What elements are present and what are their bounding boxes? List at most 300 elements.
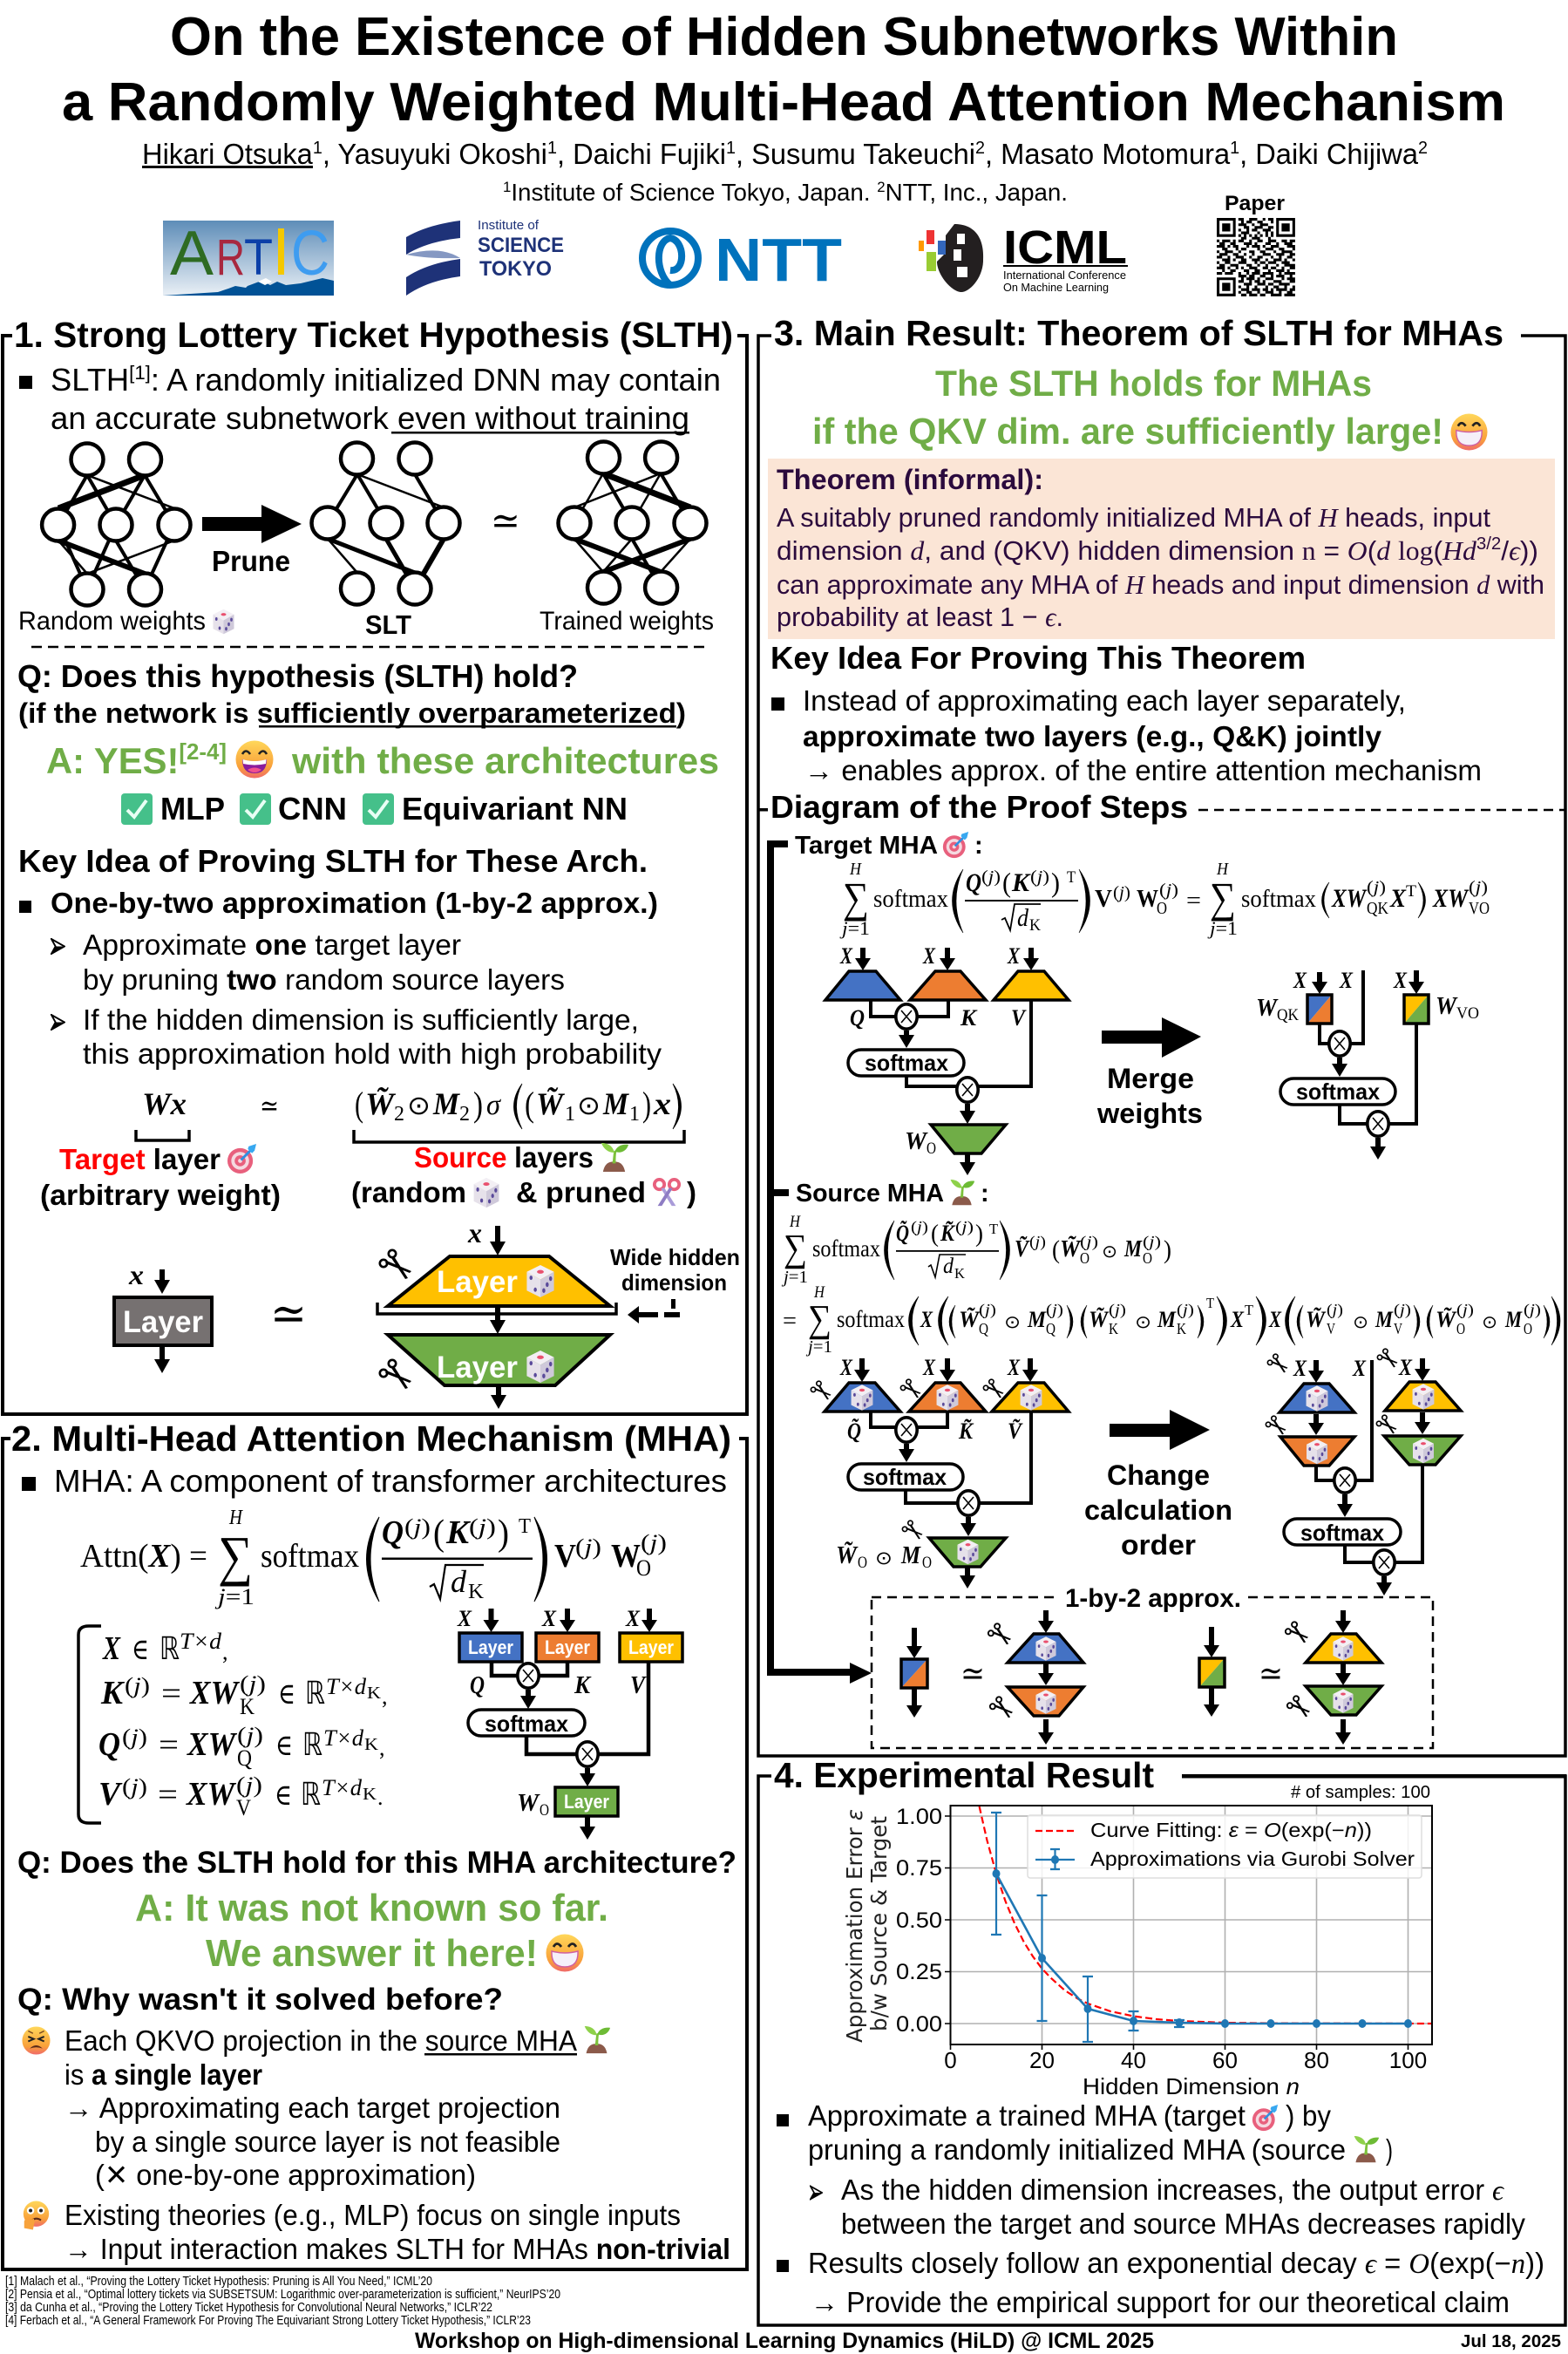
formula: definitions: , [382, 1684, 387, 1709]
headline result [812, 363, 1488, 452]
icon: QR code [1217, 218, 1295, 296]
formula: definitions: ℝ [301, 1777, 321, 1813]
label: SLT: SLT [365, 609, 411, 640]
formula: definitions: ∈ [275, 1779, 292, 1812]
logo: Science Tokyo: Institute of [478, 219, 540, 233]
formula: target MHA: ( [1002, 867, 1011, 898]
formula: source MHA: T [989, 1221, 999, 1237]
text block: experimental setting: Approximate a trained MHA (target [808, 2099, 1246, 2132]
formula: one-by-two: 2 [459, 1103, 470, 1126]
formula: source MHA: Q [1046, 1320, 1056, 1337]
formula: source MHA: ⊙ [1004, 1311, 1021, 1332]
text block: experimental setting [777, 2099, 1525, 2240]
diagram: merged target MHA: VO [1456, 1004, 1479, 1023]
arrow: change calculation order [1110, 1410, 1210, 1450]
logo: NTT: NTT [715, 226, 842, 294]
formula: definitions: ∈ [132, 1634, 149, 1666]
text block: key idea: Instead of approximating each layer separately, [803, 684, 1406, 717]
references: [4] Ferbach et al., “A General Framework For Proving The Equivariant Strong Lottery Ticket Hypothesis,” ICLR’23 [5, 2313, 531, 2328]
checklist: architectures [121, 791, 628, 827]
diagram: source MHA: ⊙ [875, 1548, 893, 1568]
headline result: The SLTH holds for MHAs [935, 363, 1372, 404]
formula: attention: H [228, 1507, 243, 1529]
label: merge weights: weights [1096, 1098, 1203, 1129]
formula: source MHA: M [1375, 1307, 1394, 1332]
formula: source MHA: X [1268, 1307, 1282, 1332]
formula: target MHA: VO [1469, 899, 1490, 918]
formula: source MHA: ) [1164, 1235, 1171, 1264]
logo: Science Tokyo: SCIENCE [478, 234, 564, 257]
symbol: approx: ≃ [491, 500, 520, 542]
diagram: MHA architecture: V [630, 1672, 647, 1699]
formula: source MHA: O [1080, 1249, 1089, 1267]
panel: 1. Strong Lottery Ticket Hypothesis [3, 315, 747, 1414]
arrow: prune [202, 505, 302, 543]
text block: one-by-two approximation [19, 887, 662, 1070]
formula: source MHA: K̃ [940, 1221, 956, 1246]
label: merge weights [1096, 1063, 1203, 1129]
formula: one-by-two: W̃ [536, 1086, 566, 1121]
axis: y tick labels: 1.00 [896, 1805, 942, 1829]
text block: one-by-two approximation: by pruning two random source layers [83, 963, 565, 996]
formula: one-by-two: ) [473, 1085, 483, 1124]
answer: not known [135, 1887, 608, 1975]
formula: definitions: T×d [180, 1629, 222, 1654]
diagram: target MHA: X [839, 943, 853, 969]
diagram: source MHA: Ṽ [1008, 1419, 1023, 1444]
formula: source MHA: j=1 [805, 1337, 832, 1357]
label: random weights: Random weights [18, 607, 206, 636]
formula: source MHA: (j) [1524, 1301, 1541, 1319]
formula: definitions: V [236, 1795, 251, 1820]
formula: one-by-two: M [602, 1086, 630, 1121]
formula: source MHA: H [813, 1283, 825, 1302]
title: a Randomly Weighted Multi-Head Attention Mechanism [62, 72, 1505, 133]
text block: key idea: approximate two layers (e.g., Q&K) jointly [803, 720, 1382, 752]
formula: source MHA: d [943, 1255, 954, 1278]
formula: source MHA: Q [979, 1320, 988, 1337]
diagram: target MHA: softmax [865, 1050, 949, 1076]
axis: x tick labels: 60 [1212, 2047, 1238, 2073]
formula: target MHA: V [1095, 885, 1112, 913]
text block: key idea [771, 684, 1482, 786]
legend: Approximations via Gurobi Solver [1090, 1847, 1415, 1870]
diagram: two pruned layers: x [467, 1217, 482, 1248]
panel: 2. Multi-Head Attention Mechanism [3, 1419, 747, 2269]
formula: target MHA: = [1186, 888, 1201, 915]
text block: experimental setting: between the target and source MHAs decreases rapidly [841, 2208, 1525, 2240]
diagram: reordered source MHA [1266, 1349, 1461, 1595]
label: change calculation order: Change [1107, 1459, 1210, 1491]
formula: definitions: = [158, 1777, 178, 1812]
formula: attention: K [468, 1581, 485, 1603]
references: [1] Malach et al., “Proving the Lottery Ticket Hypothesis: Pruning is All You Need,” ICML’20 [5, 2274, 432, 2289]
formula: target MHA: ) [1051, 867, 1060, 898]
box: 1-by-2 approx: ≃ [1259, 1656, 1283, 1692]
label: source MHA: : [981, 1180, 989, 1208]
formula: target MHA: H [849, 860, 862, 879]
formula: source MHA: T [1245, 1302, 1254, 1318]
formula: definitions: V [98, 1776, 123, 1813]
formula: definitions [78, 1626, 387, 1823]
footer: workshop: Workshop on High-dimensional Learning Dynamics (HiLD) @ ICML 2025 [415, 2329, 1154, 2353]
axis: x tick labels: 20 [1029, 2047, 1055, 2073]
text block: single layer reason: Each QKVO projection in the source MHA [64, 2024, 577, 2057]
heading: key idea: Key Idea For Proving This Theorem [770, 640, 1306, 676]
chart: approximation error vs hidden dimension [842, 1805, 1432, 2099]
logo: ARTIC: C [291, 219, 329, 289]
footer: date: Jul 18, 2025 [1461, 2332, 1561, 2351]
diagram: MHA architecture: X [625, 1606, 641, 1631]
formula: source MHA: W̃ [1060, 1235, 1082, 1262]
text block: SLTH definition: : A randomly initialized DNN may contain [151, 362, 721, 398]
diagram: reordered source MHA: X [1293, 1356, 1307, 1381]
diagram: two pruned layers: Layer [437, 1265, 518, 1299]
callout: wide hidden dimension: dimension [621, 1269, 727, 1296]
formula: source MHA: (j) [1046, 1301, 1063, 1319]
answer: not known: We answer it here! [206, 1932, 538, 1975]
panel: 3. Main Result [758, 313, 1565, 1756]
diagram: target MHA: W [905, 1128, 928, 1155]
diagram: single layer [114, 1259, 212, 1373]
formula: source MHA: (j) [1394, 1301, 1411, 1319]
text block: existing theories [24, 2199, 730, 2265]
diagram: MHA architecture [457, 1606, 682, 1840]
formula: one-by-two: Wx [142, 1086, 187, 1121]
formula: target MHA: W [1137, 885, 1158, 913]
series: curve fitting [980, 1806, 1431, 2024]
formula: source MHA: (j) [955, 1218, 974, 1236]
checklist: architectures: CNN [278, 791, 347, 827]
formula: one-by-two: ≃ [260, 1090, 279, 1121]
formula: source MHA: ⊙ [1353, 1311, 1368, 1332]
diagram: MHA architecture: K [574, 1672, 592, 1699]
text block: exponential decay [777, 2247, 1544, 2318]
label: source layers [351, 1141, 696, 1208]
question: does the hypothesis hold: (if the network is sufficiently overparameterized) [18, 697, 686, 729]
formula: target MHA: Q [966, 868, 981, 897]
authors [142, 138, 1428, 170]
text block: existing theories: → Input interaction makes SLTH for MHAs non-trivial [64, 2233, 730, 2265]
diagram: MHA architecture: Layer [564, 1791, 609, 1813]
formula: source MHA: Ṽ [1015, 1235, 1030, 1262]
axis: x tick labels: 40 [1121, 2047, 1146, 2073]
formula: target MHA: (j) [981, 867, 1001, 887]
question: does SLTH hold for MHA: Q: Does the SLTH hold for this MHA architecture? [17, 1846, 736, 1880]
tick: source branch [770, 1189, 789, 1196]
formula: definitions: (j) [236, 1772, 262, 1798]
axis: x tick labels: 0 [944, 2047, 957, 2073]
theorem box: /ϵ)) [1501, 535, 1538, 566]
formula: attention: Attn(X) = [80, 1538, 207, 1575]
formula: target MHA: ∑ [843, 874, 869, 922]
formula: attention: (j) [641, 1530, 667, 1555]
question: does the hypothesis hold: Q: Does this hypothesis (SLTH) hold? [17, 658, 578, 694]
formula: one-by-two: W̃ [365, 1086, 397, 1121]
formula: source MHA: (j) [1029, 1233, 1046, 1251]
axis: y label: b/w Source & Target [866, 1816, 892, 2031]
authors: , Daiki Chijiwa [1239, 138, 1419, 170]
formula: source MHA: Q̃ [896, 1221, 909, 1246]
formula: one-by-two: 1 [629, 1103, 640, 1126]
formula: source MHA: j=1 [781, 1268, 808, 1287]
label: source MHA: Source MHA [796, 1180, 944, 1208]
diagram: single layer: x [128, 1259, 144, 1290]
formula: definitions: K [367, 1684, 382, 1703]
theorem box: probability at least 1 − ϵ. [777, 602, 1063, 632]
heading: 2. Multi-Head Attention Mechanism (MHA) [11, 1419, 731, 1459]
formula: definitions: K [363, 1785, 377, 1804]
question: why not solved: Q: Why wasn't it solved before? [17, 1983, 503, 2017]
formula: target MHA: ∑ [1210, 874, 1236, 922]
formula: attention: O [636, 1555, 651, 1581]
formula: source MHA: (j) [1109, 1301, 1126, 1319]
authors: , Daichi Fujiki [557, 138, 726, 170]
formula: definitions: K [100, 1675, 126, 1711]
affiliations: NTT, Inc., Japan. [886, 179, 1068, 206]
legend: Curve Fitting: ε = O(exp(− n)) [1090, 1819, 1372, 1841]
text block: experimental setting: pruning a randomly initialized MHA (source [808, 2133, 1346, 2166]
formula: one-by-two: σ [486, 1089, 501, 1121]
label: merge weights: Merge [1107, 1063, 1194, 1094]
diagram: merged target MHA: X [1393, 968, 1408, 993]
authors: 1 [1230, 139, 1239, 158]
theorem box: dimension d, and (QKV) hidden dimension n = O(d log(Hd [777, 535, 1476, 566]
diagram: target MHA: O [927, 1140, 936, 1158]
label: trained weights: Trained weights [540, 607, 714, 636]
text block: MHA definition: MHA: A component of transformer architectures [54, 1463, 727, 1499]
formula: definitions: XW [186, 1776, 237, 1813]
diagram: target MHA: V [1011, 1005, 1027, 1031]
references [5, 2274, 560, 2328]
formula: source MHA: ⊙ [1102, 1241, 1117, 1262]
formula: definitions: , [379, 1735, 385, 1760]
formula: attention: j=1 [214, 1584, 255, 1609]
formula: target MHA: (j) [1113, 883, 1130, 902]
formula: attention [80, 1507, 667, 1609]
formula: attention: softmax [261, 1538, 359, 1575]
label: target layer: (arbitrary weight) [40, 1179, 281, 1211]
diagram: MHA architecture: O [540, 1801, 549, 1820]
axis: x label: Hidden Dimension n [1083, 2073, 1300, 2099]
text block: exponential decay: → Provide the empirical support for our theoretical claim [811, 2286, 1510, 2318]
formula: target MHA: softmax [1241, 885, 1316, 913]
formula: attention: ∑ [218, 1525, 253, 1587]
question: does the hypothesis hold [17, 658, 686, 729]
affiliations: 2 [877, 179, 886, 195]
formula: source MHA: K [954, 1265, 966, 1282]
diagram: merged target MHA: W [1256, 995, 1279, 1022]
formula: source MHA: ∑ [784, 1227, 807, 1269]
text block: existing theories: Existing theories (e.g., MLP) focus on single inputs [64, 2199, 681, 2231]
axis: y tick labels: 0.00 [896, 2012, 942, 2037]
formula: attention: V [554, 1538, 576, 1575]
formula: one-by-two: 2 [394, 1103, 404, 1126]
formula: source MHA: (j) [1080, 1233, 1098, 1251]
formula: source MHA: O [1524, 1320, 1532, 1337]
formula: definitions: ∈ [278, 1678, 295, 1711]
diagram: reordered source MHA: X [1398, 1355, 1413, 1380]
axis: x tick labels: 100 [1389, 2047, 1427, 2073]
formula: source MHA: V [1394, 1320, 1402, 1337]
text block: single layer reason [22, 2024, 610, 2191]
formula: attention: (j) [404, 1514, 431, 1540]
arrow: merge weights [1102, 1017, 1201, 1058]
formula: attention: K [445, 1514, 472, 1551]
heading: 4. Experimental Result [774, 1755, 1154, 1795]
diagram: two pruned layers [377, 1217, 616, 1409]
formula: attention: d [451, 1564, 467, 1599]
formula: target MHA: XW [1432, 884, 1470, 913]
formula: source MHA: O [1456, 1320, 1465, 1337]
formula: definitions: T×d [322, 1775, 363, 1800]
formula: source MHA: K [1177, 1320, 1186, 1337]
authors: , Masato Motomura [985, 138, 1231, 170]
paper label: Paper [1225, 192, 1285, 215]
answer: yes: with these architectures [291, 740, 719, 781]
logo: ARTIC: R [216, 229, 245, 286]
diagram: MHA architecture: W [517, 1790, 540, 1817]
references: [3] da Cunha et al., “Proving the Lottery Ticket Hypothesis for Convolutional Neural Networks,” ICLR’22 [5, 2300, 492, 2315]
formula: one-by-two: ⊙ [577, 1091, 601, 1121]
formula: one-by-two: ( [525, 1085, 534, 1124]
label: source layers: & pruned [516, 1176, 646, 1208]
diagram: reordered source MHA: X [1352, 1356, 1367, 1381]
axis: y tick labels: 0.50 [896, 1908, 942, 1933]
label: target MHA: Target MHA [795, 832, 938, 860]
formula: source MHA: (j) [1327, 1301, 1343, 1319]
diagram: target MHA: K [960, 1005, 978, 1031]
text block: single layer reason: by a single source layer is not feasible [95, 2126, 560, 2158]
formula: definitions: Q [98, 1726, 120, 1763]
diagram: MHA architecture: Layer [468, 1636, 513, 1658]
diagram: single layer: Layer [123, 1305, 203, 1339]
diagram: target MHA: X [1007, 943, 1021, 969]
formula: target MHA: softmax [873, 885, 948, 913]
label: target MHA: : [974, 832, 983, 860]
text block: single layer reason: → Approximating each target projection [64, 2092, 560, 2124]
diagram: source MHA: softmax [863, 1464, 947, 1490]
answer: not known: A: It was not known so far. [135, 1887, 608, 1929]
axis: y tick labels: 0.75 [896, 1856, 942, 1881]
authors: , Susumu Takeuchi [736, 138, 975, 170]
diagram: reordered source MHA: softmax [1300, 1520, 1385, 1546]
answer: yes [46, 738, 719, 781]
text block: key idea: → enables approx. of the entire attention mechanism [804, 754, 1482, 786]
formula: source MHA: = [783, 1308, 797, 1335]
logo: ARTIC [163, 219, 334, 296]
diagram: merged target MHA: softmax [1296, 1078, 1381, 1105]
diagram: source MHA: O [858, 1554, 867, 1572]
theorem box [768, 459, 1555, 639]
formula: definitions: ℝ [302, 1727, 322, 1763]
text block: experimental setting: ) by [1286, 2099, 1331, 2132]
axis: y tick labels: 0.25 [896, 1960, 942, 1984]
text block: one-by-two approximation: Approximate one target layer [83, 929, 461, 961]
diagram: MHA architecture: Q [470, 1672, 485, 1699]
authors: 2 [1418, 139, 1428, 158]
heading: 3. Main Result: Theorem of SLTH for MHAs [774, 313, 1504, 353]
formula: source MHA: ) [975, 1221, 983, 1248]
formula: source MHA: ⊙ [1482, 1311, 1497, 1332]
formula: definitions: (j) [122, 1774, 147, 1800]
formula: source MHA: H [789, 1213, 801, 1231]
diagram: merged target MHA [1256, 968, 1479, 1160]
diagram: random network [42, 443, 190, 605]
formula: source MHA: W̃ [959, 1307, 981, 1332]
formula: target MHA: (j) [1367, 878, 1386, 897]
series: approximations [991, 1813, 1412, 2042]
formula: source MHA: X [920, 1307, 933, 1332]
logo: NTT [642, 226, 842, 294]
formula: one-by-two: ⊙ [407, 1091, 431, 1121]
formula: target MHA: T [1406, 882, 1416, 901]
heading: 1. Strong Lottery Ticket Hypothesis (SLTH) [14, 315, 733, 355]
formula: source MHA: (j) [1177, 1301, 1194, 1319]
text block: one-by-two approximation: this approximation hold with high probability [83, 1038, 662, 1070]
text block: one-by-two approximation: If the hidden dimension is sufficiently large, [83, 1004, 639, 1036]
axis: y label [842, 1809, 892, 2043]
axis: x tick labels: 80 [1304, 2047, 1329, 2073]
logo: Science Tokyo [406, 219, 564, 296]
text block: single layer reason: is a single layer [64, 2058, 262, 2091]
label: source layers: ) [687, 1176, 696, 1208]
diagram: trained network [558, 441, 706, 603]
axis: y label: Approximation Error ε [842, 1809, 867, 2043]
formula: target MHA: K [1029, 916, 1041, 935]
formula: one-by-two: ) [642, 1085, 651, 1124]
headline result: if the QKV dim. are sufficiently large! [812, 411, 1443, 452]
formula: definitions: XW [187, 1726, 238, 1763]
formula: target MHA: (j) [1159, 881, 1178, 900]
arrow: flow line to 1-by-2 approx [770, 844, 850, 1672]
formula: source MHA: X [1230, 1307, 1245, 1332]
formula: attention: ) [498, 1514, 509, 1554]
text block: exponential decay: Results closely follow an exponential decay ϵ = O(exp(−n)) [808, 2247, 1544, 2280]
formula: one-by-two [142, 1084, 682, 1129]
label: target layer [40, 1143, 281, 1211]
formula: target MHA: d [1017, 905, 1029, 932]
theorem box: Theorem (informal): [777, 464, 1043, 495]
label: prune: Prune [212, 545, 290, 577]
text block: one-by-two approximation: One-by-two approximation (1-by-2 approx.) [51, 887, 658, 919]
authors: Hikari Otsuka [142, 138, 315, 170]
heading: diagram of proof steps [759, 789, 1565, 825]
title [62, 7, 1505, 133]
heading: key idea: Key Idea of Proving SLTH for These Arch. [18, 843, 648, 879]
text block: experimental setting: ) [1386, 2133, 1393, 2166]
formula: source MHA: (j) [1143, 1233, 1161, 1251]
formula: definitions: , [222, 1639, 228, 1664]
box: 1-by-2 approx: 1-by-2 approx. [1065, 1584, 1241, 1613]
formula: definitions: = [159, 1727, 179, 1762]
formula: target MHA: j=1 [1207, 917, 1238, 939]
formula: definitions: (j) [237, 1723, 263, 1748]
answer: yes: A: YES! [46, 740, 180, 781]
formula: definitions: (j) [122, 1725, 147, 1750]
text block: SLTH definition [19, 362, 721, 436]
diagram: merged target MHA: X [1293, 968, 1307, 993]
answer: yes: [2-4] [179, 738, 227, 765]
formula: target MHA: X [1389, 884, 1407, 913]
checklist: architectures: MLP [160, 791, 225, 827]
text block: SLTH definition: [1] [129, 362, 151, 384]
label: change calculation order: calculation [1084, 1494, 1232, 1526]
formula: source MHA: M [1123, 1235, 1143, 1262]
title: On the Existence of Hidden Subnetworks Within [170, 7, 1398, 67]
formula: definitions: T×d [323, 1725, 364, 1751]
text block: single layer reason: (✕ one-by-one approximation) [95, 2159, 476, 2191]
